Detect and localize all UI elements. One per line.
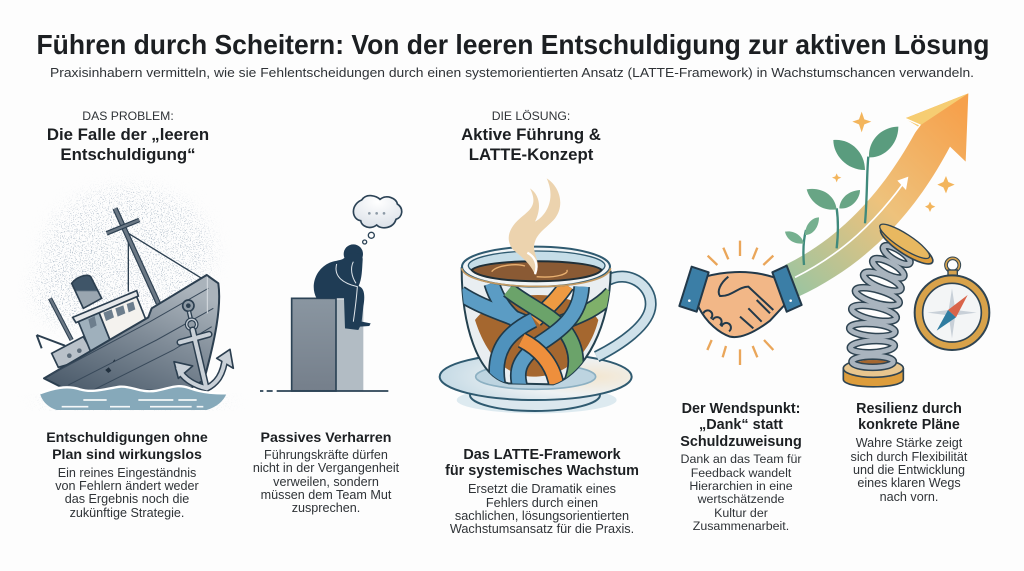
text: latte framework: sachlichen, lösungsorientierten	[455, 509, 629, 523]
heading: die loesung: LATTE-Konzept	[469, 145, 594, 164]
text: latte framework	[445, 447, 639, 536]
illustration: sinking ship with anchor	[33, 188, 233, 410]
text: resilienz: Resilienz durch	[856, 401, 962, 417]
saucer	[470, 379, 600, 411]
text: entschuldigungen ohne plan: das Ergebnis noch die	[65, 492, 189, 506]
text: wendepunkt: Der Wendspunkt:	[682, 401, 800, 417]
text: resilienz: sich durch Flexibilität	[851, 450, 968, 464]
text: resilienz: eines klaren Wegs	[857, 476, 961, 490]
illustration: compass	[915, 258, 989, 350]
icon: thought bubble	[353, 196, 402, 244]
text: latte framework: Das LATTE-Framework	[463, 447, 622, 463]
text: passives verharren: Führungskräfte dürfen	[264, 448, 388, 462]
text: latte framework: Fehlers durch einen	[486, 496, 598, 510]
text: entschuldigungen ohne plan: Ein reines Eingeständnis	[58, 466, 196, 480]
text: wendepunkt: Kultur der	[714, 506, 768, 520]
text: wendepunkt: Zusammenarbeit.	[693, 519, 789, 533]
illustration: spring	[843, 219, 937, 387]
heading: das problem: DAS PROBLEM:	[82, 109, 174, 123]
heading: das problem: Die Falle der „leeren	[47, 125, 209, 144]
cup body	[462, 268, 611, 384]
text: latte framework: Ersetzt die Dramatik eines	[468, 482, 616, 496]
text: resilienz: und die Entwicklung	[853, 463, 965, 477]
text: wendepunkt: Feedback wandelt	[691, 466, 792, 480]
heading: das problem: Entschuldigung“	[60, 145, 196, 164]
illustration: growth arrow	[785, 93, 968, 297]
text: wendepunkt: Hierarchien in eine	[689, 479, 793, 493]
text: resilienz: konkrete Pläne	[858, 417, 960, 433]
text: entschuldigungen ohne plan: zukünftige Strategie.	[70, 506, 184, 520]
text: wendepunkt	[680, 401, 802, 533]
text: resilienz	[851, 401, 968, 504]
text: wendepunkt: „Dank“ statt	[699, 417, 783, 433]
text: resilienz: nach vorn.	[880, 490, 938, 504]
illustration: coffee cup woven with strands	[440, 178, 651, 413]
handle	[597, 277, 651, 357]
icon: seedlings	[785, 127, 898, 265]
text: entschuldigungen ohne plan	[46, 430, 208, 520]
text: latte framework: für systemisches Wachstum	[445, 463, 639, 479]
text: entschuldigungen ohne plan: Plan sind wirkungslos	[52, 447, 202, 463]
title: Führen durch Scheitern: Von der leeren Entschuldigung zur aktiven Lösung	[36, 29, 990, 60]
text: passives verharren: Passives Verharren	[261, 430, 391, 446]
text: passives verharren	[253, 430, 400, 515]
subtitle: Praxisinhabern vermitteln, wie sie Fehlentscheidungen durch einen systemorientierten Ansatz (LATTE-Framework) in Wachstumschancen verwandeln.	[50, 65, 974, 80]
steam	[509, 178, 560, 275]
text: wendepunkt: Schuldzuweisung	[680, 434, 802, 450]
heading: die loesung: Aktive Führung &	[461, 125, 601, 144]
icon: sparkles	[832, 112, 955, 212]
text: passives verharren: zusprechen.	[292, 501, 360, 515]
text: latte framework: Wachstumsansatz für die Praxis.	[450, 522, 634, 536]
text: passives verharren: verweilen, sondern	[273, 475, 379, 489]
illustration: handshake	[679, 241, 802, 365]
cup rim and coffee	[462, 247, 610, 287]
illustration: person brooding on block	[260, 196, 402, 391]
text: passives verharren: nicht in der Vergangenheit	[253, 461, 400, 475]
text: wendepunkt: wertschätzende	[697, 492, 784, 506]
text: wendepunkt: Dank an das Team für	[680, 452, 802, 466]
text: entschuldigungen ohne plan: von Fehlern ändert weder	[55, 479, 199, 493]
text: resilienz: Wahre Stärke zeigt	[856, 436, 963, 450]
text: passives verharren: müssen dem Team Mut	[261, 488, 392, 502]
heading: die loesung: DIE LÖSUNG:	[492, 109, 570, 123]
text: entschuldigungen ohne plan: Entschuldigungen ohne	[46, 430, 208, 446]
heading: die loesung	[461, 109, 601, 164]
heading: das problem	[47, 109, 209, 164]
